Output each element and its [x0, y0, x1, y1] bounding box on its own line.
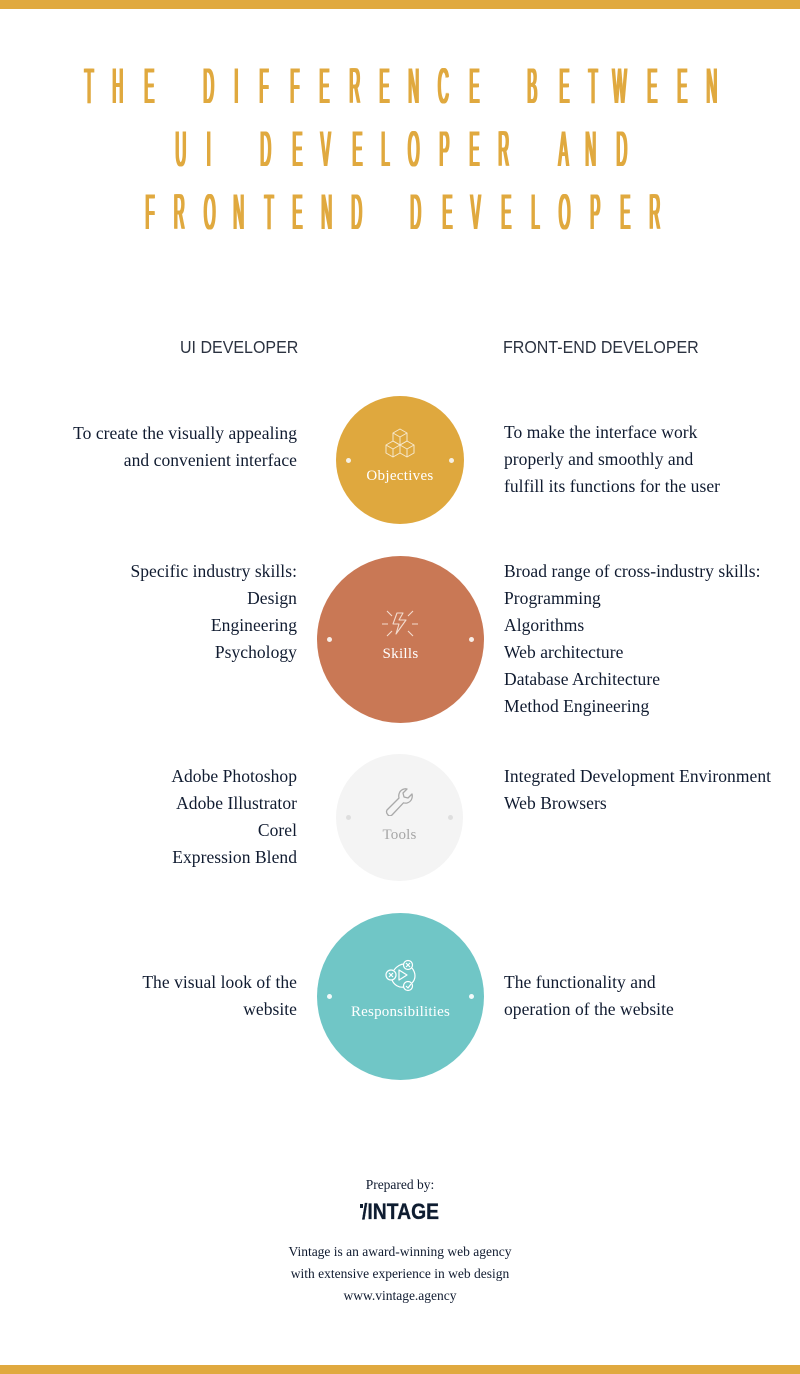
responsibilities: front-end text	[504, 972, 674, 1019]
icon: wrench	[386, 788, 413, 816]
skills: front-end text: Database Architecture	[504, 669, 660, 689]
agency description: Vintage is an award-winning web agency	[288, 1244, 512, 1259]
skills: front-end text: Algorithms	[504, 615, 584, 635]
title	[84, 58, 717, 240]
circle: skills	[317, 556, 484, 723]
icon: cubes	[386, 428, 414, 458]
column heading: UI developer: UI DEVELOPER	[180, 337, 298, 357]
skills: front-end text: Web architecture	[504, 642, 623, 662]
left dot	[346, 815, 351, 820]
logo tick	[360, 1204, 363, 1208]
top bar	[0, 0, 800, 9]
tools: UI text: Corel	[258, 820, 297, 840]
label: tools: Tools	[382, 827, 417, 843]
responsibilities: UI text: The visual look of the	[142, 972, 297, 992]
tools: UI text	[171, 766, 297, 867]
objectives: front-end text: properly and smoothly and	[504, 449, 693, 469]
tools: UI text: Expression Blend	[172, 847, 297, 867]
tools: UI text: Adobe Illustrator	[176, 793, 297, 813]
responsibilities: UI text: website	[243, 999, 297, 1019]
prepared by: Prepared by:	[366, 1177, 434, 1192]
objectives: UI text	[73, 423, 297, 470]
tools: front-end text: Integrated Development Environment	[504, 766, 771, 786]
title: UI DEVELOPER AND	[174, 121, 626, 177]
tools: UI text: Adobe Photoshop	[171, 766, 297, 786]
left dot	[327, 994, 332, 999]
title: THE DIFFERENCE BETWEEN	[84, 58, 716, 114]
objectives: UI text: and convenient interface	[124, 450, 297, 470]
column heading: front-end developer: FRONT-END DEVELOPER	[503, 337, 699, 357]
circle: responsibilities	[317, 913, 484, 1080]
right dot	[449, 458, 454, 463]
circle: tools	[336, 754, 463, 881]
skills: front-end text: Broad range of cross-industry skills:	[504, 561, 761, 581]
right dot	[448, 815, 453, 820]
skills: front-end text: Method Engineering	[504, 696, 649, 716]
responsibilities: UI text	[142, 972, 297, 1019]
agency description: www.vintage.agency	[343, 1288, 457, 1303]
icon: lightning spark	[382, 610, 418, 636]
left dot	[346, 458, 351, 463]
skills: UI text: Specific industry skills:	[130, 561, 297, 581]
icon: flow cycle	[385, 960, 416, 992]
tools: front-end text	[504, 766, 771, 813]
skills: UI text: Psychology	[215, 642, 297, 662]
skills: front-end text: Programming	[504, 588, 601, 608]
title: FRONTEND DEVELOPER	[144, 184, 659, 240]
right dot	[469, 637, 474, 642]
label: objectives: Objectives	[366, 468, 434, 484]
responsibilities: front-end text: The functionality and	[504, 972, 656, 992]
circle: objectives	[336, 396, 464, 524]
skills: UI text: Design	[247, 588, 297, 608]
bottom bar	[0, 1365, 800, 1374]
skills: UI text	[130, 561, 297, 662]
objectives: front-end text: To make the interface work	[504, 422, 697, 442]
objectives: UI text: To create the visually appealing	[73, 423, 297, 443]
objectives: front-end text	[504, 422, 720, 496]
tools: front-end text: Web Browsers	[504, 793, 607, 813]
left dot	[327, 637, 332, 642]
label: skills: Skills	[382, 646, 418, 662]
label: responsibilities: Responsibilities	[351, 1004, 450, 1020]
responsibilities: front-end text: operation of the website	[504, 999, 674, 1019]
right dot	[469, 994, 474, 999]
logo word: /INTAGE	[362, 1199, 439, 1224]
objectives: front-end text: fulfill its functions for the user	[504, 476, 720, 496]
agency description: with extensive experience in web design	[291, 1266, 509, 1281]
skills: UI text: Engineering	[211, 615, 297, 635]
agency description	[288, 1244, 512, 1303]
skills: front-end text	[504, 561, 761, 716]
